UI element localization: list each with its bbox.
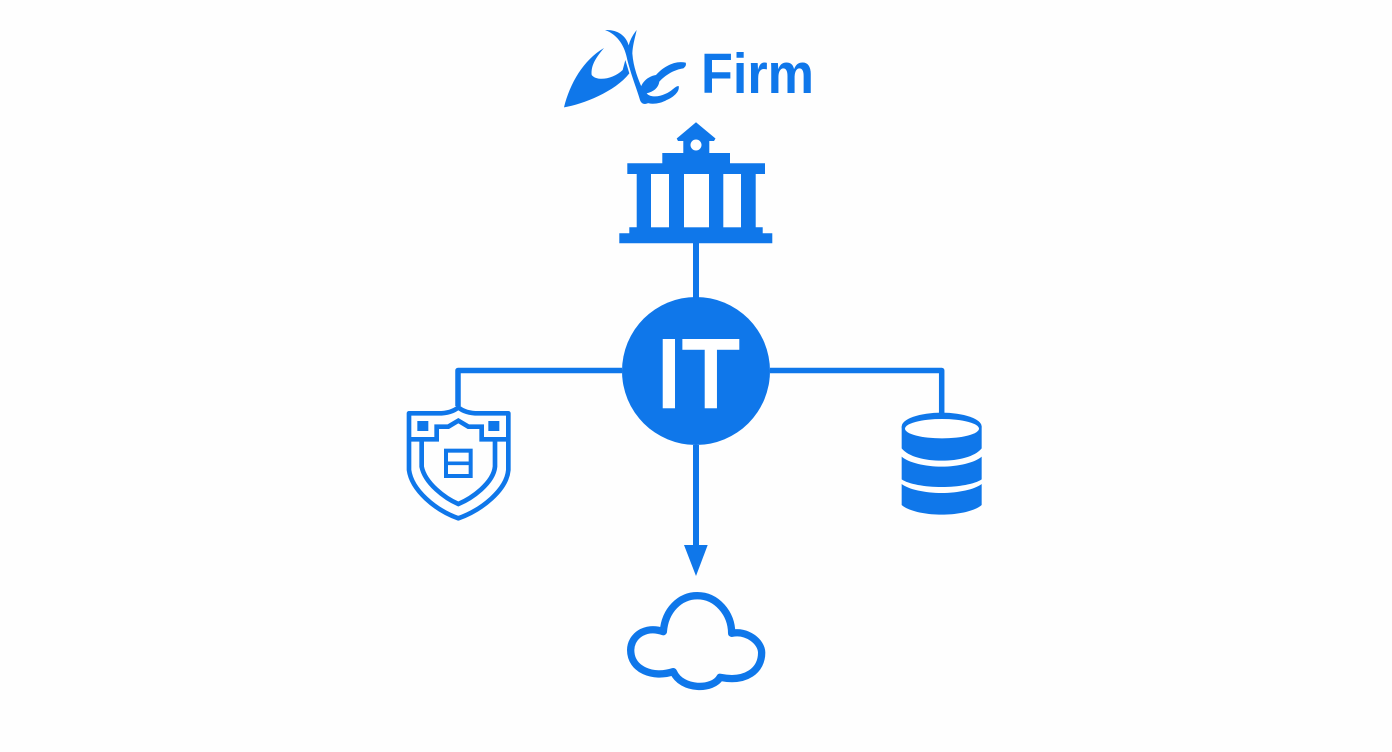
- icon: logo mark: [564, 30, 686, 107]
- icon: cloud: [631, 596, 762, 686]
- connector lines: [458, 243, 942, 547]
- icon: security shield: [409, 407, 508, 518]
- icon: database: [902, 413, 982, 515]
- icon: bank building: [619, 122, 772, 243]
- logo: Firm: [564, 30, 814, 107]
- central IT circle: [622, 297, 770, 445]
- logo wordmark: Firm: [701, 42, 814, 106]
- IT label: IT: [656, 320, 740, 428]
- arrow head: [684, 545, 708, 576]
